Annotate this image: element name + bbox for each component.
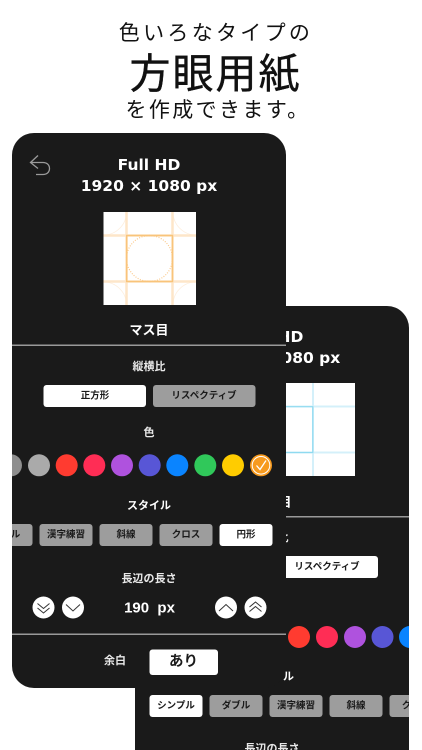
label: aspect ratio: 縦横比	[132, 359, 166, 373]
back grid preview	[286, 383, 355, 476]
style buttons: 円形	[236, 528, 256, 540]
back style buttons: ダブル	[222, 700, 251, 712]
front heading: Full HD	[118, 156, 180, 174]
back style buttons: 漢字練習	[277, 700, 315, 712]
front grid preview	[104, 212, 196, 305]
label: style: スタイル	[127, 499, 171, 512]
back label: style: スタイル	[250, 670, 294, 683]
front label: grid: マス目	[129, 322, 169, 338]
icon: back arrow	[30, 156, 50, 174]
length value: 190 px	[124, 600, 176, 616]
back colour swatches	[288, 626, 421, 648]
icon: double chevron up	[244, 596, 266, 618]
button: square	[44, 385, 146, 407]
label: margin: 余白	[104, 653, 126, 667]
button: square: 正方形	[81, 390, 110, 402]
icon: selected orange swatch	[250, 454, 272, 476]
icon: double chevron down	[32, 596, 54, 618]
label: colour: 色	[144, 425, 154, 439]
colour swatches	[0, 454, 272, 476]
style buttons: 漢字練習	[47, 528, 85, 540]
back button: respective	[276, 556, 378, 578]
title line 3: を作成できます。	[125, 94, 311, 124]
back label: grid: マス目	[252, 494, 292, 510]
style buttons	[0, 524, 272, 546]
icon: chevron up	[215, 596, 237, 618]
button: respective	[153, 385, 256, 407]
panel: back screen	[135, 306, 422, 750]
back style buttons: シンプル	[157, 700, 195, 712]
label: long side length: 長辺の長さ	[122, 572, 176, 585]
back heading	[286, 331, 340, 366]
icon: chevron down	[62, 596, 84, 618]
back heading: 1920 × 1080 px	[204, 349, 340, 367]
style buttons: 斜線	[116, 528, 136, 540]
title line 2: 方眼用紙	[130, 40, 302, 100]
back button: respective: リスペクティブ	[294, 560, 360, 572]
title line 1: 色いろなタイプの	[119, 17, 313, 47]
panel: front screen	[0, 133, 286, 688]
style buttons: クロス	[172, 530, 200, 540]
back style buttons	[150, 695, 422, 717]
front heading: 1920 × 1080 px	[81, 177, 217, 195]
button: margin on	[150, 650, 218, 675]
button: margin on: あり	[169, 653, 198, 670]
back style buttons: 斜線	[346, 700, 366, 712]
back label: aspect ratio: 縦横比	[256, 530, 288, 544]
title	[119, 17, 313, 124]
back heading: Full HD	[241, 328, 303, 346]
button: respective: リスペクティブ	[171, 390, 237, 402]
front heading	[82, 158, 217, 194]
